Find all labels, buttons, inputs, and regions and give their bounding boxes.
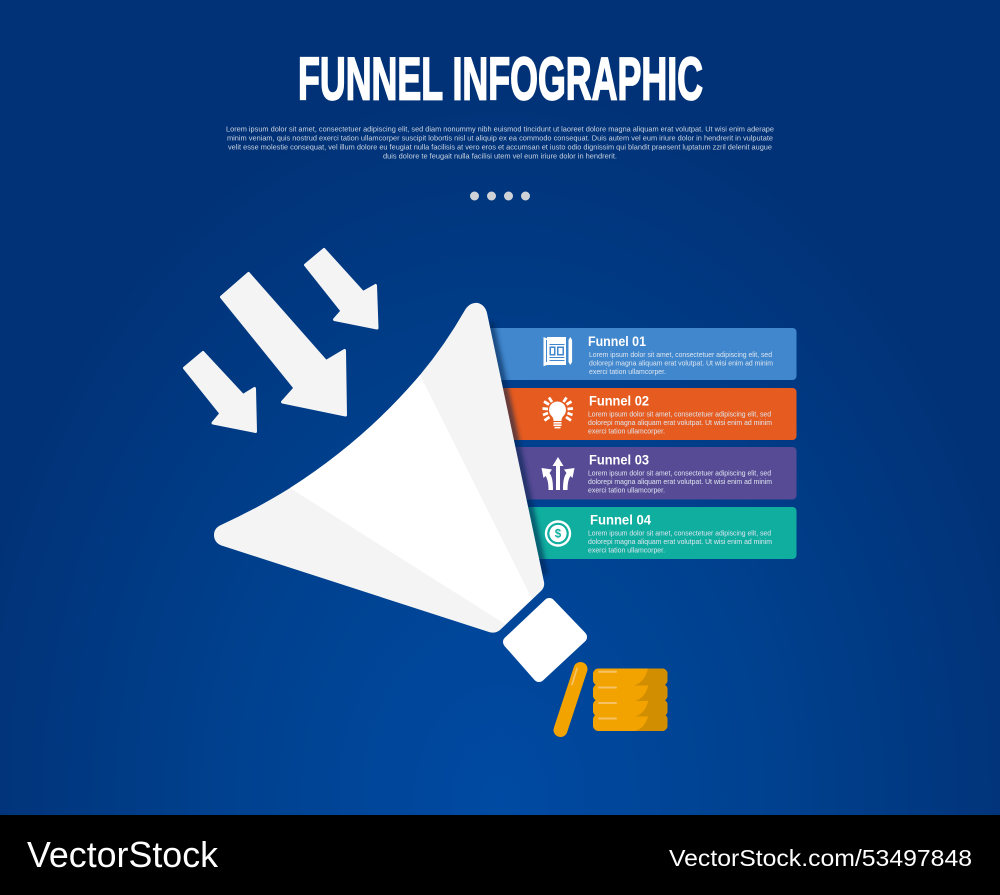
bar 4 text: Lorem ipsum dolor sit amet, consectetuer adipiscing elit, sed [588, 528, 771, 538]
bar 3 text: dolorepi magna aliquam erat volutpat. Ut wisi enim ad minim [588, 477, 772, 486]
bar 2 text [588, 410, 772, 436]
bar 4 text: dolorepi magna aliquam erat volutpat. Ut wisi enim ad minim [588, 537, 772, 546]
panel: funnel 02 [470, 388, 796, 440]
icon: newspaper [544, 337, 572, 366]
funnel body [214, 303, 544, 633]
title: FUNNEL INFOGRAPHIC [298, 44, 703, 112]
bar 1 text [589, 350, 773, 376]
intro text block: Lorem ipsum dolor sit amet, consectetuer adipiscing elit, sed diam nonummy nibh euismod tincidunt ut laoreet dolore magna aliquam erat volutpat. Ut wisi enim aderape [226, 124, 774, 134]
icon: diverging arrows [542, 457, 574, 490]
panel: funnel 01 [470, 328, 796, 380]
pagination dots [470, 192, 530, 200]
bar 3 text: exerci tation ullamcorper. [588, 486, 665, 494]
bar 3 heading: Funnel 03 [589, 452, 649, 468]
funnel spout [509, 604, 581, 676]
bar 4 heading: Funnel 04 [590, 512, 651, 528]
funnel shadow on bars [486, 322, 548, 575]
panel: funnel 03 [490, 447, 796, 500]
bar 2 heading: Funnel 02 [589, 394, 649, 408]
intro text block: duis dolore te feugait nulla facilisi utem vel eum iriure dolor in hendrerit. [383, 152, 617, 160]
intro text block: minim veniam, quis nostrud exerci tation ullamcorper suscipit lobortis nisl ut aliquip ex ea commodo consequat. Duis autem vel eum iriure dolor in hendrerit in vulputate [227, 134, 773, 142]
coin highlights [598, 671, 617, 720]
panel: funnel 04 [500, 507, 796, 559]
coin shading [634, 668, 668, 731]
bar 1 heading: Funnel 01 [588, 334, 646, 349]
bar 3 text [588, 468, 772, 494]
funnel highlight [290, 375, 532, 624]
bar 4 text: exerci tation ullamcorper. [588, 546, 665, 554]
footer bar [0, 815, 1000, 895]
bar 1 text: Lorem ipsum dolor sit amet, consectetuer adipiscing elit, sed [589, 350, 772, 359]
bar 3 text: Lorem ipsum dolor sit amet, consectetuer adipiscing elit, sed [588, 468, 771, 478]
footer url: VectorStock.com/53497848 [669, 845, 972, 871]
icon: dollar coin [545, 520, 571, 547]
arrow: large centre [222, 274, 346, 415]
icon: dollar coin: $ [555, 528, 562, 540]
arrows [184, 250, 377, 432]
coin stack [593, 668, 668, 731]
bar 2 text: exerci tation ullamcorper. [588, 426, 665, 436]
arrow: top [306, 250, 377, 328]
icon: light bulb [542, 398, 573, 428]
bar 1 text: exerci tation ullamcorper. [589, 367, 666, 376]
intro text block [226, 124, 774, 160]
funnel base shape [214, 303, 544, 633]
arrow: left [184, 352, 256, 432]
intro text block: velit esse molestie consequat, vel illum dolore eu feugiat nulla facilisis at vero eros et accumsan et iusto odio dignissim qui blandit praesent luptatum zzril delenit augue [228, 142, 772, 152]
bar 2 text: dolorepi magna aliquam erat volutpat. Ut wisi enim ad minim [588, 418, 772, 427]
footer logo: VectorStock [27, 834, 219, 875]
bar 4 text [588, 528, 772, 554]
bar 1 text: dolorepi magna aliquam erat volutpat. Ut wisi enim ad minim [589, 358, 773, 368]
bar 2 text: Lorem ipsum dolor sit amet, consectetuer adipiscing elit, sed [588, 410, 771, 418]
coins [593, 668, 668, 731]
coin tipping over [560, 668, 580, 730]
